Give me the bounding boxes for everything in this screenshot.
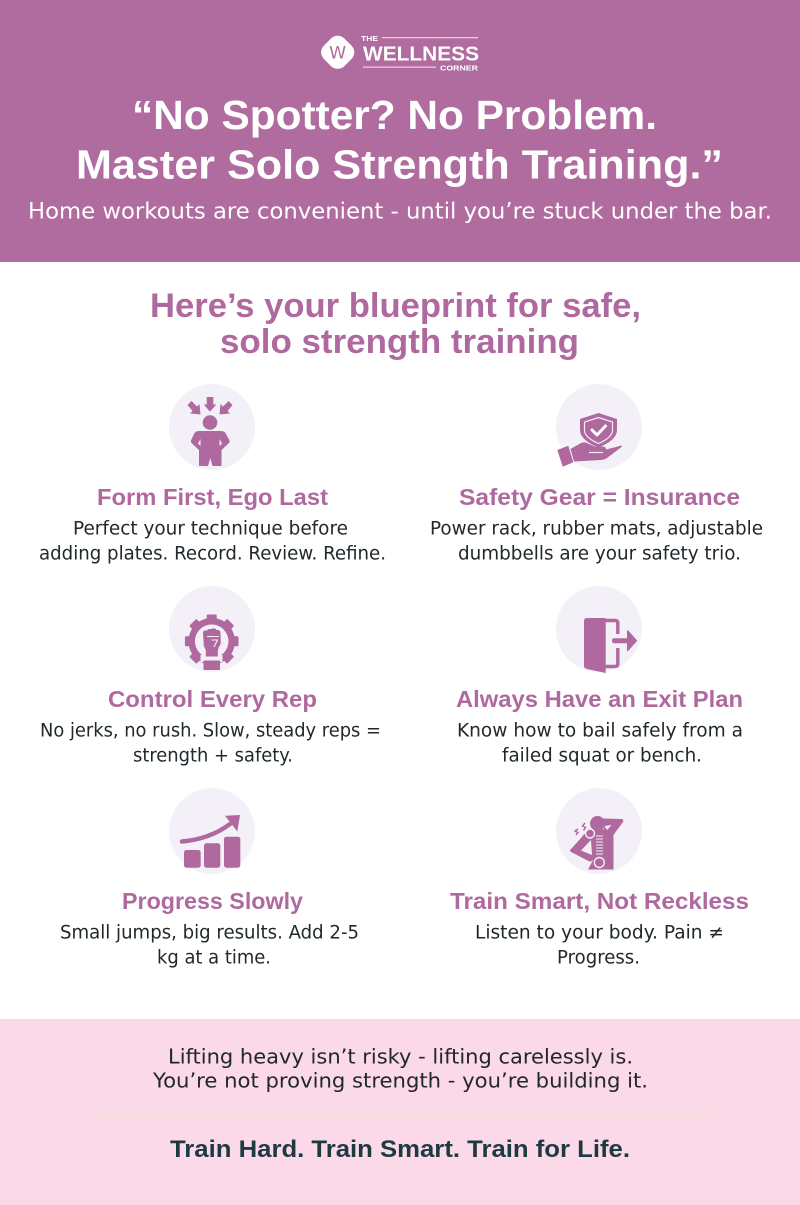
panel: control every rep	[40, 586, 381, 766]
icon: fist in gear	[169, 586, 255, 672]
panel: footer	[0, 1019, 800, 1205]
panel: header banner	[0, 0, 800, 262]
logo: The Wellness Corner: THE	[361, 34, 378, 43]
item description: Listen to your body. Pain ≠	[475, 922, 724, 944]
item description: Power rack, rubber mats, adjustable	[430, 518, 763, 540]
subtitle: Home workouts are convenient - until you’re stuck under the bar.	[28, 198, 772, 224]
icon: hand holding shield	[556, 384, 642, 470]
title: Master Solo Strength Training.”	[76, 142, 723, 188]
logo: The Wellness Corner: CORNER	[440, 64, 479, 72]
title: “No Spotter? No Problem.	[132, 92, 657, 138]
item title: Safety Gear = Insurance	[459, 484, 740, 510]
panel: progress slowly	[60, 788, 359, 968]
logo: The Wellness Corner: WELLNESS	[363, 44, 479, 66]
item description: strength + safety.	[133, 746, 293, 766]
icon: person with arrows	[169, 384, 255, 470]
item title: Train Smart, Not Reckless	[450, 888, 749, 914]
item description: Progress.	[557, 948, 640, 968]
item description: failed squat or bench.	[502, 746, 702, 766]
panel: form first	[39, 384, 386, 564]
item description: Perfect your technique before	[73, 518, 348, 540]
panel: train smart	[450, 788, 749, 968]
item description	[40, 720, 381, 766]
footer message: You’re not proving strength - you’re building it.	[152, 1068, 648, 1092]
item title: Form First, Ego Last	[97, 484, 328, 510]
section heading: Here’s your blueprint for safe,	[150, 287, 641, 325]
item description	[430, 518, 763, 564]
item description	[60, 922, 359, 968]
item description: kg at a time.	[157, 948, 271, 968]
panel: exit plan	[456, 586, 743, 766]
title	[76, 92, 723, 188]
section heading	[150, 287, 641, 361]
icon: back pain figure	[556, 788, 642, 874]
item title: Progress Slowly	[122, 888, 303, 914]
item description: Know how to bail safely from a	[457, 720, 743, 742]
icon: growth bars and arrow	[169, 788, 255, 874]
icon: door with exit arrow	[556, 586, 642, 673]
section heading: solo strength training	[220, 323, 579, 361]
item description: adding plates. Record. Review. Refine.	[39, 544, 386, 564]
item description	[39, 518, 386, 564]
logo: The Wellness Corner	[317, 32, 479, 73]
item description: Small jumps, big results. Add 2-5	[60, 922, 359, 944]
footer message	[152, 1044, 648, 1092]
panel: safety gear	[430, 384, 763, 564]
item title: Control Every Rep	[108, 686, 317, 712]
item title: Always Have an Exit Plan	[456, 686, 743, 712]
item description: dumbbells are your safety trio.	[458, 544, 741, 564]
logo: The Wellness Corner: W	[329, 44, 346, 64]
footer tagline: Train Hard. Train Smart. Train for Life.	[170, 1136, 630, 1163]
item description	[475, 922, 724, 968]
item description: No jerks, no rush. Slow, steady reps =	[40, 720, 381, 742]
item description	[457, 720, 743, 766]
footer message: Lifting heavy isn’t risky - lifting carelessly is.	[168, 1044, 633, 1068]
